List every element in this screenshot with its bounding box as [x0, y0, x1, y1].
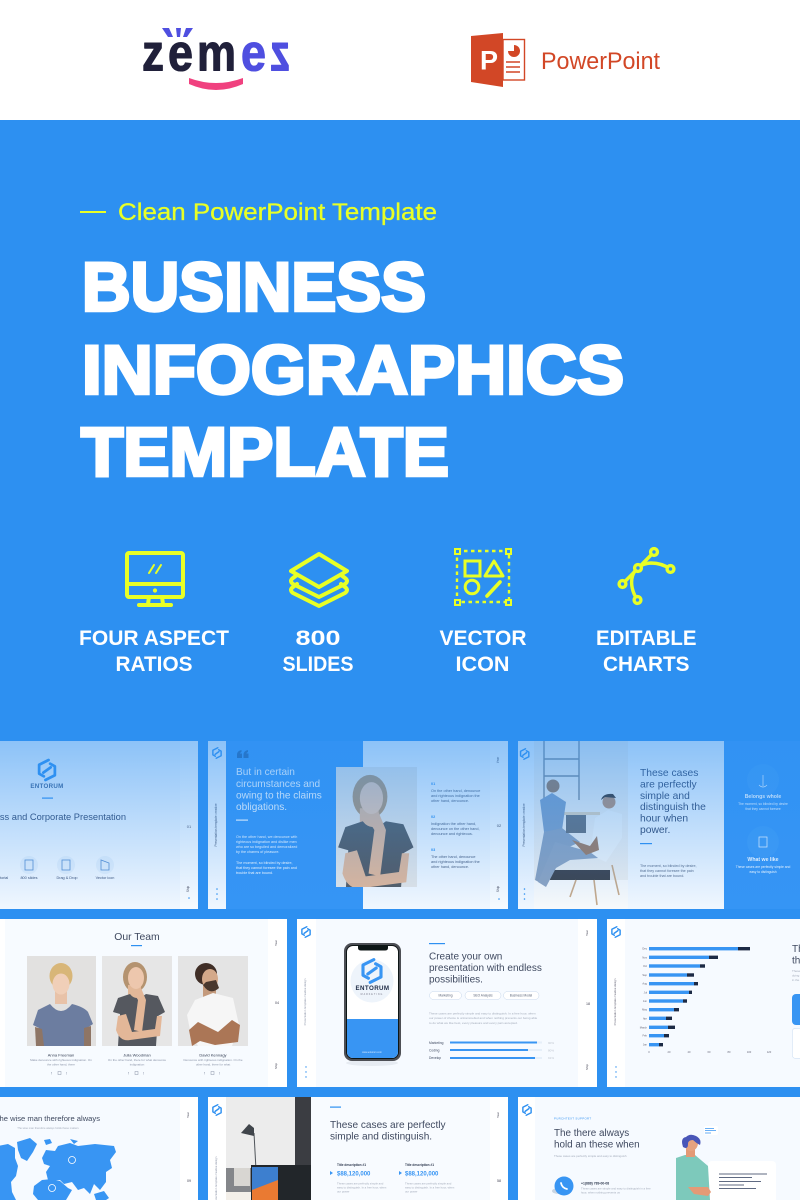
slide: quote with portrait: 03: [431, 848, 435, 852]
slide: our team: [0, 919, 287, 1087]
slide: quote with portrait: denounce and righteous.: [431, 832, 473, 836]
slide: room photo with figures: Year: [496, 1112, 500, 1118]
slide: office photo and text: [518, 741, 800, 909]
man in blue shirt: [546, 780, 560, 792]
slide: stacked bar chart: [607, 919, 800, 1087]
slide: phone mockup: Business Model: [510, 994, 533, 998]
slide: our team: Ship: [274, 1063, 278, 1069]
slide: our team: indignation: [130, 1062, 145, 1066]
slide: customer support: PURCHTEXT SUPPORT: [554, 1116, 591, 1120]
slide: office photo and text: and trouble that are bound.: [640, 874, 684, 878]
slide: office photo and text: Presentation template creative: [522, 803, 526, 847]
slide: quote with portrait: 01: [431, 782, 435, 786]
feature labels: EDITABLE: [596, 627, 696, 650]
row 1 gaps: [198, 741, 518, 909]
slide: cover: Drag & Drop: [56, 876, 78, 880]
slide: stacked bar chart: Presentation template creative design: [613, 978, 617, 1025]
slide: customer support: These cases are perfectly simple and easy to distinguish: [554, 1154, 627, 1158]
phone: MARKETING: [361, 993, 383, 996]
slide: phone mockup: Marketing: [429, 1041, 444, 1045]
bar chart: 40: [688, 1050, 691, 1054]
slide row 2: [0, 919, 800, 1087]
slide: quote with portrait: The other hand, denounce: [431, 855, 476, 859]
slide: quote with portrait: Year: [496, 756, 500, 763]
slide row 3: [0, 1097, 800, 1200]
bar chart: May: [642, 1008, 648, 1012]
bar chart: 60: [708, 1050, 711, 1054]
slide: room photo with figures: our power: [405, 1190, 418, 1194]
slide: office photo and text: power.: [640, 825, 670, 836]
slide: phone mockup: These cases are perfectly simple and easy to distinguish. In a free hour, when: [429, 1012, 536, 1016]
slide: phone mockup: 90%: [548, 1041, 554, 1045]
slide: room photo with figures: [208, 1097, 508, 1200]
slide: quote with portrait: Ship: [496, 886, 500, 892]
phone: www.entorum.com: [362, 1051, 382, 1054]
slide: quote with portrait: other hand, denounce.: [431, 799, 469, 803]
slide: office photo and text: easy to distinguish: [749, 870, 777, 874]
slide: our team: On the other hand, there for what denounce: [108, 1058, 166, 1062]
slide: cover: 01: [187, 824, 192, 829]
slide: cover: 800 slides: [20, 876, 38, 880]
slide: office photo and text: These cases are perfectly simple and: [736, 865, 790, 869]
slide: office photo and text: are perfectly: [640, 780, 698, 790]
slide: quote with portrait: righteous indignation and dislike men: [236, 840, 297, 844]
slide: phone mockup: Create your own: [429, 952, 502, 962]
slide: quote with portrait: other hand, denounce.: [431, 865, 469, 869]
slide: quote with portrait: The moment, so blinded by desire,: [236, 861, 293, 865]
bar chart: Jan: [643, 1043, 648, 1047]
logo: zemes: m: [197, 24, 236, 82]
slide: phone mockup: to do what we like best, every pleasure and every pain accepted.: [429, 1021, 518, 1025]
slide: office photo and text: that they cannot foresee: [745, 807, 781, 811]
contact row: +1(888) 789-00-08: [581, 1182, 609, 1186]
logo: PowerPoint: P: [480, 46, 498, 76]
subtitle: Clean PowerPoint Template: [118, 199, 437, 226]
logo: zemes: [142, 24, 290, 90]
icon: bezier curve: [619, 549, 674, 603]
slide: office photo and text: simple and: [640, 791, 690, 802]
contact row: These cases are simple and easy to distinguish in a free: [581, 1186, 651, 1190]
photo: David: [178, 956, 248, 1046]
slide: quote with portrait: trouble that are bound.: [236, 871, 273, 875]
man in white shirt: [602, 797, 616, 808]
slide: phone mockup: Ship: [585, 1064, 589, 1070]
slide: world map: 09: [187, 1179, 191, 1183]
slide: room photo with figures: $88,120,000: [405, 1172, 439, 1178]
feature labels: FOUR ASPECT: [79, 627, 229, 650]
title: BUSINESS: [82, 248, 426, 325]
bar chart: 120: [767, 1050, 772, 1054]
slide: office photo and text: hour when: [640, 814, 688, 824]
slide: room photo with figures: simple and distinguish.: [330, 1132, 432, 1142]
slide: office photo and text: The moment, so blinded by desire: [738, 802, 788, 806]
photo: Anna: [27, 956, 96, 1046]
icon: vector shapes: [455, 549, 511, 605]
slide: our team: the other hand, there: [47, 1062, 75, 1066]
slide: room photo with figures: These cases are perfectly: [330, 1120, 447, 1131]
slide: phone mockup: 80%: [548, 1048, 554, 1052]
slide: phone mockup: SEO Analysis: [473, 994, 493, 998]
logo: PowerPoint: PowerPoint: [541, 48, 660, 75]
slide: room photo with figures: our power: [337, 1190, 350, 1194]
slide: quote with portrait: 02: [497, 823, 502, 828]
feature labels: 800: [296, 627, 340, 650]
bar chart: Nov: [642, 955, 648, 959]
feature labels: SLIDES: [282, 653, 354, 676]
slide: our team: Make denounce with righteous indignation. On: [30, 1058, 92, 1062]
slide: phone mockup: Marketing: [438, 994, 453, 998]
feature labels: CHARTS: [603, 653, 690, 676]
slide: quote with portrait: who are so beguiled and demoralized: [236, 845, 297, 849]
feature labels: [79, 627, 696, 676]
slide: quote with portrait: owing to the claims: [236, 790, 322, 802]
portrait photo: [336, 767, 417, 887]
slide: our team: David Kennagy: [199, 1052, 227, 1058]
slide: quote with portrait: obligations.: [236, 802, 287, 813]
slide: cover: ENTORUM: [30, 783, 64, 790]
slide: quote with portrait: Presentation template creative: [214, 803, 218, 847]
slide: office photo and text: These cases: [640, 768, 698, 779]
photo: Julia: [102, 956, 172, 1046]
phone: ENTORUM: [356, 985, 389, 992]
slide: office photo and text: Belongs whole: [745, 794, 781, 800]
logo: PowerPoint: [471, 33, 660, 87]
bar chart: 20: [668, 1050, 671, 1054]
illustration: support agent: [676, 1126, 776, 1200]
slide: office photo and text: distinguish the: [640, 802, 706, 813]
slide: phone mockup: Year: [585, 930, 589, 936]
slide: our team: Denounce with righteous indignation. On the: [183, 1058, 243, 1062]
title: TEMPLATE: [81, 413, 449, 490]
bar chart: 100: [747, 1050, 752, 1054]
slide: world map: Year: [186, 1112, 190, 1118]
slide: quote with portrait: by the charms of pleasure.: [236, 850, 279, 854]
slide: phone mockup: presentation with endless: [429, 963, 542, 974]
slide: room photo with figures: Title description #1: [405, 1163, 434, 1167]
bar chart: Dec: [642, 947, 648, 951]
slide: office photo and text: that they cannot foresee the pain: [640, 869, 694, 873]
slide: room photo with figures: $88,120,000: [337, 1172, 371, 1178]
slide: our team: Anna Freeman: [48, 1052, 74, 1058]
bar chart: Sep: [642, 973, 648, 977]
slide: cover: [0, 741, 198, 909]
slide: quote with portrait: and righteous indignation the: [431, 794, 480, 798]
slide: phone mockup: Develop: [429, 1056, 441, 1060]
slide: cover: Vector icon: [96, 876, 114, 880]
slide: quote with portrait: [208, 741, 508, 909]
slide: quote with portrait: On the other hand, we denounce with: [236, 835, 297, 839]
slide: quote with portrait: On the other hand, denounce: [431, 789, 480, 793]
phone: [344, 943, 401, 1061]
bar chart: Aug: [642, 982, 648, 986]
icon: quote marks: [237, 750, 248, 758]
slide: phone mockup: 18: [586, 1002, 590, 1006]
bar chart: [640, 947, 772, 1054]
slide: room photo with figures: 58: [497, 1179, 501, 1183]
slide: room photo with figures: Title description #1: [337, 1163, 366, 1167]
slide: our team: other hand, there for what: [196, 1062, 230, 1066]
slide: quote with portrait: denounce on the other hand,: [431, 827, 480, 831]
bar chart: Apr: [643, 1016, 647, 1020]
logo: zemes: z: [142, 24, 164, 82]
world map: [0, 1138, 116, 1200]
slide row 1: [0, 741, 800, 909]
slide: office photo and text: The moment, so blinded by desire,: [640, 864, 697, 868]
bar chart: March: [640, 1025, 648, 1029]
row 1 blue fade overlay: [0, 741, 800, 909]
logo: zemes: e: [241, 24, 266, 82]
slide: phone mockup: Presentation template creative design: [303, 978, 307, 1025]
slide: our team: 04: [275, 1001, 279, 1005]
slide: room photo with figures: These cases are perfectly simple and: [337, 1182, 384, 1186]
slide: phone mockup: possibilities.: [429, 974, 483, 986]
slide: stacked bar chart: doing: [792, 974, 800, 978]
title: INFOGRAPHICS: [82, 331, 624, 408]
bar chart: Feb: [643, 1034, 648, 1038]
slide: world map: The wise man therefore always holds these matters: [17, 1126, 79, 1130]
contact row: [552, 1176, 651, 1196]
slide: cover: Ship: [186, 886, 190, 892]
slide: customer support: [518, 1097, 800, 1200]
slide: stacked bar chart: in the: [792, 978, 800, 982]
feature labels: ICON: [456, 653, 510, 676]
slide: our team: Julia Woodman: [123, 1052, 151, 1058]
slide: room photo with figures: easy to distinguish. In a free hour, when: [337, 1186, 387, 1190]
slide: quote with portrait: circumstances and: [236, 779, 320, 790]
feature labels: RATIOS: [116, 653, 192, 676]
bar chart: Jun: [643, 999, 648, 1003]
slide: phone mockup: our power of choice is untrammelled and when nothing prevents our being able: [429, 1016, 537, 1020]
slide: quote with portrait: that they cannot foresee the pain and: [236, 866, 297, 870]
slide: quote with portrait: 02: [431, 815, 435, 819]
icon: monitor: [127, 553, 183, 605]
bar chart: Oct: [643, 964, 647, 968]
slide: office photo and text: What we like: [747, 857, 779, 863]
logo: zemes: e: [168, 24, 193, 82]
slide: world map: [0, 1097, 198, 1200]
slide: quote with portrait: Indignation the other hand,: [431, 822, 476, 826]
icon: layers: [291, 554, 347, 606]
slide: phone mockup: Coding: [429, 1048, 440, 1052]
slide: customer support: hold an these when: [554, 1140, 640, 1150]
bar chart: 80: [728, 1050, 731, 1054]
title: [81, 248, 624, 490]
slide: quote with portrait: and righteous indignation the: [431, 860, 480, 864]
slide: room photo with figures: These cases are perfectly simple and: [405, 1182, 452, 1186]
slide: our team: Our Team: [114, 932, 160, 943]
bar chart: Jul: [644, 990, 647, 994]
bar chart: 0: [648, 1050, 650, 1054]
photo: desk with monitor: [226, 1097, 311, 1200]
slide: quote with portrait: But in certain: [236, 767, 295, 778]
slide: customer support: The there always: [554, 1128, 629, 1139]
slide: room photo with figures: easy to distinguish. In a free hour, when: [405, 1186, 455, 1190]
slide: phone mockup: [297, 919, 597, 1087]
contact row: hour, when nothing prevents us: [581, 1190, 620, 1194]
slide: our team: Year: [274, 940, 278, 946]
photo: two men in office: [534, 741, 628, 909]
logo: zemes: z: [270, 24, 290, 82]
feature labels: VECTOR: [440, 627, 526, 650]
slide: phone mockup: 91%: [548, 1056, 554, 1060]
white header band: [0, 0, 800, 120]
